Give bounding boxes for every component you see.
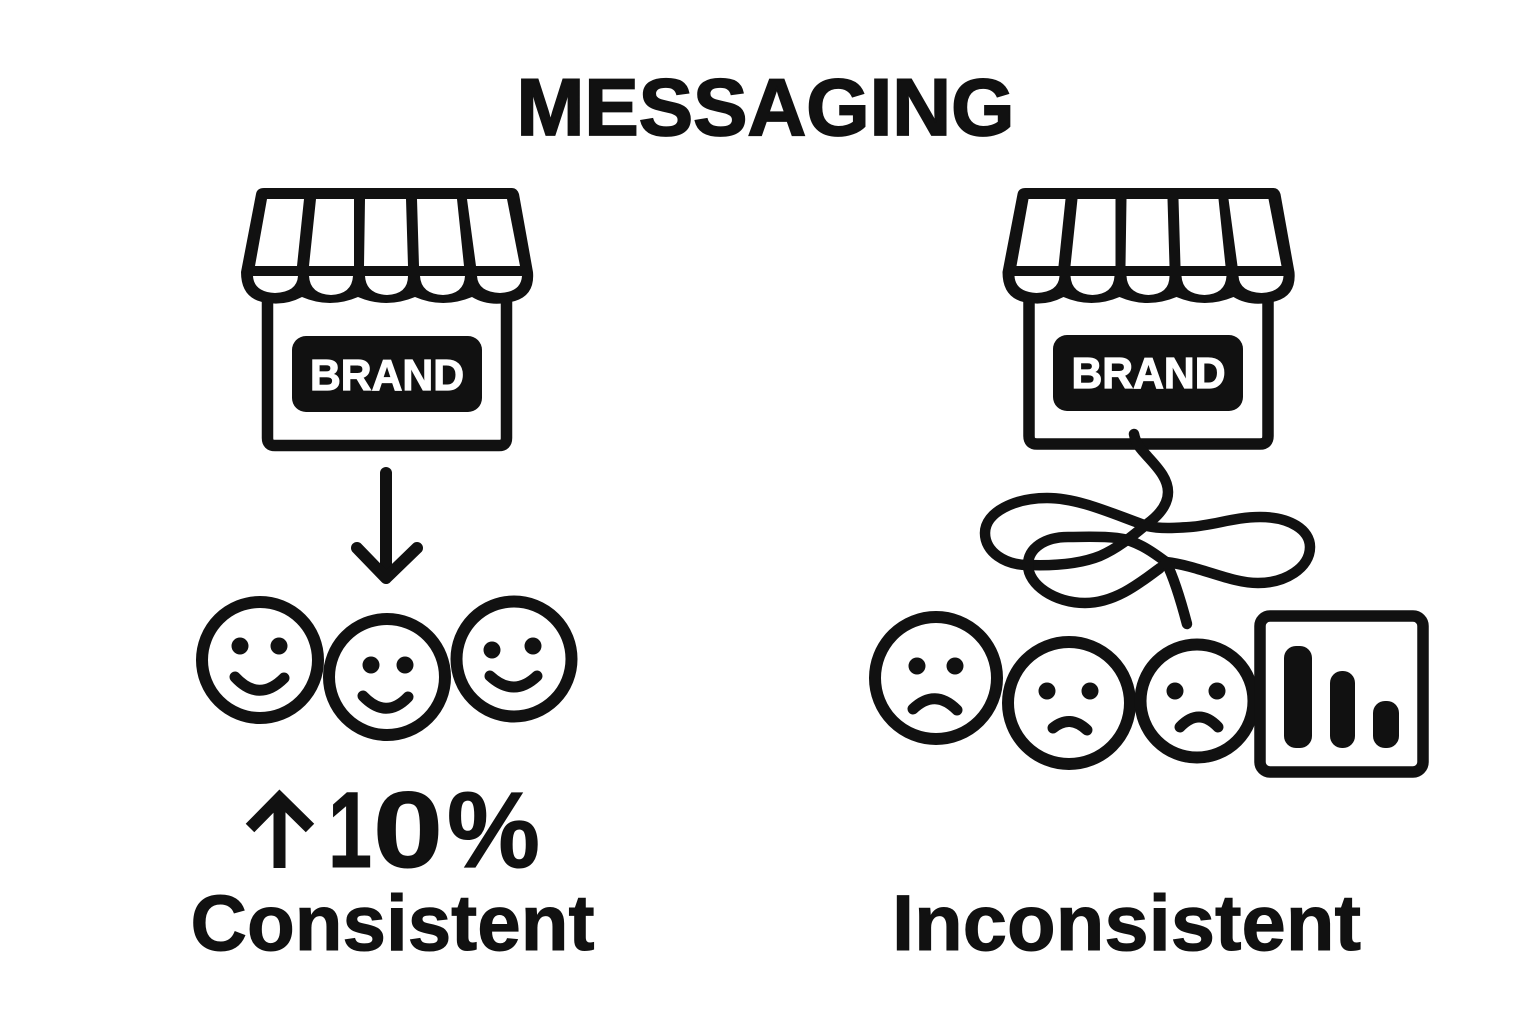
brand sign [1053,335,1243,411]
icon: declining bar chart [1260,616,1423,772]
storefront wall [268,298,506,446]
label: consistent: Consistent [190,878,594,967]
stat: up 10 percent: % [447,769,540,890]
icon: inconsistent brand store [1002,188,1295,444]
arrow: tangled line [985,434,1310,624]
title: MESSAGING [516,63,1014,153]
icon: happy faces [202,602,572,735]
icon: sad faces [875,617,1254,764]
awning [1002,188,1295,304]
awning [241,188,533,304]
icon: consistent brand store [241,188,533,446]
label: inconsistent: Inconsistent [892,878,1361,967]
stat: up 10 percent [250,769,540,890]
arrow: straight down [357,473,417,578]
brand sign [292,336,482,412]
brand sign: BRAND [1072,349,1226,398]
stat: up 10 percent: 1 [328,769,372,890]
stat: up 10 percent: 0 [373,769,443,890]
storefront wall [1029,298,1268,444]
brand sign: BRAND [310,351,464,400]
